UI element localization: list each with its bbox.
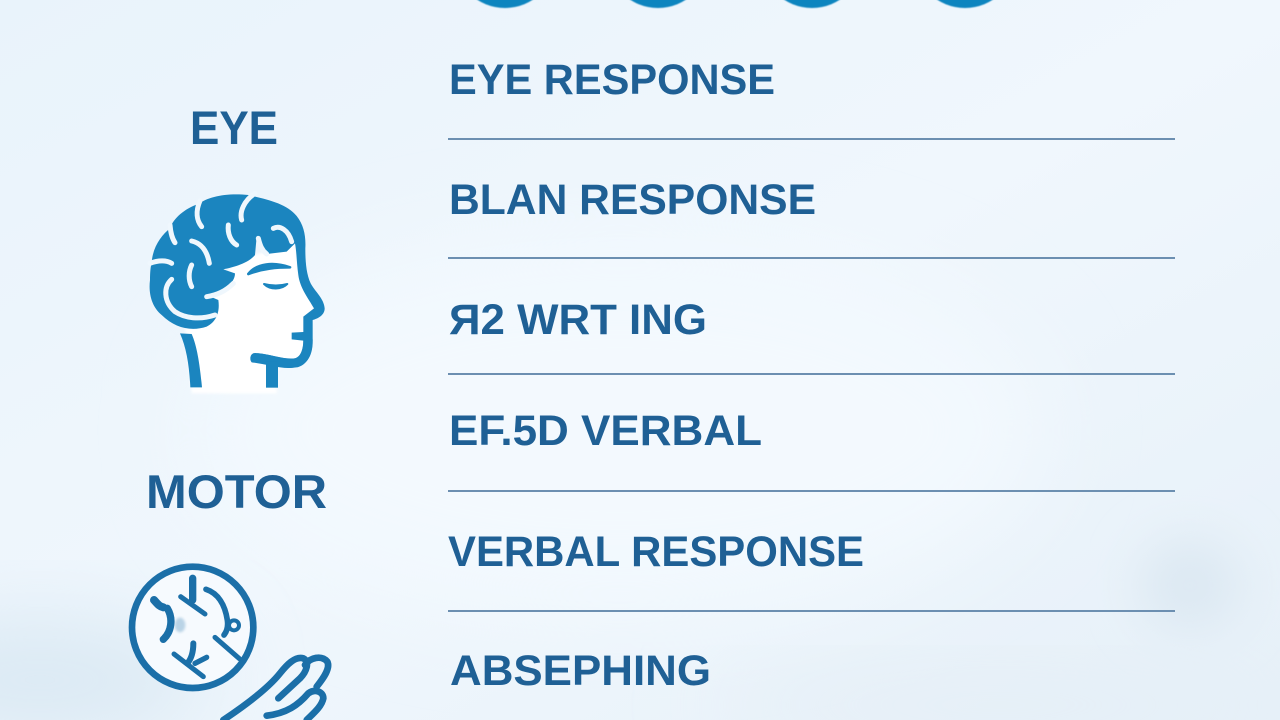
row: EYE RESPONSE: EYE RESPONSE <box>449 56 775 104</box>
icon: head with brain <box>150 193 325 393</box>
row: VERBAL RESPONSE: VERBAL RESPONSE <box>448 528 864 576</box>
icon: circle with hand <box>132 567 328 720</box>
row: EF.5D VERBAL: EF.5D VERBAL <box>449 407 762 455</box>
top row of cropped circles <box>454 0 1016 8</box>
left heading: EYE: EYE <box>190 101 278 154</box>
left heading: MOTOR: MOTOR <box>146 465 327 518</box>
sub-icon: hand <box>223 658 328 720</box>
row: BLAN RESPONSE: BLAN RESPONSE <box>449 176 816 224</box>
row: R2 WRT ING: Я2 WRT ING <box>449 296 707 344</box>
row: ABSEPHING: ABSEPHING <box>450 647 711 695</box>
